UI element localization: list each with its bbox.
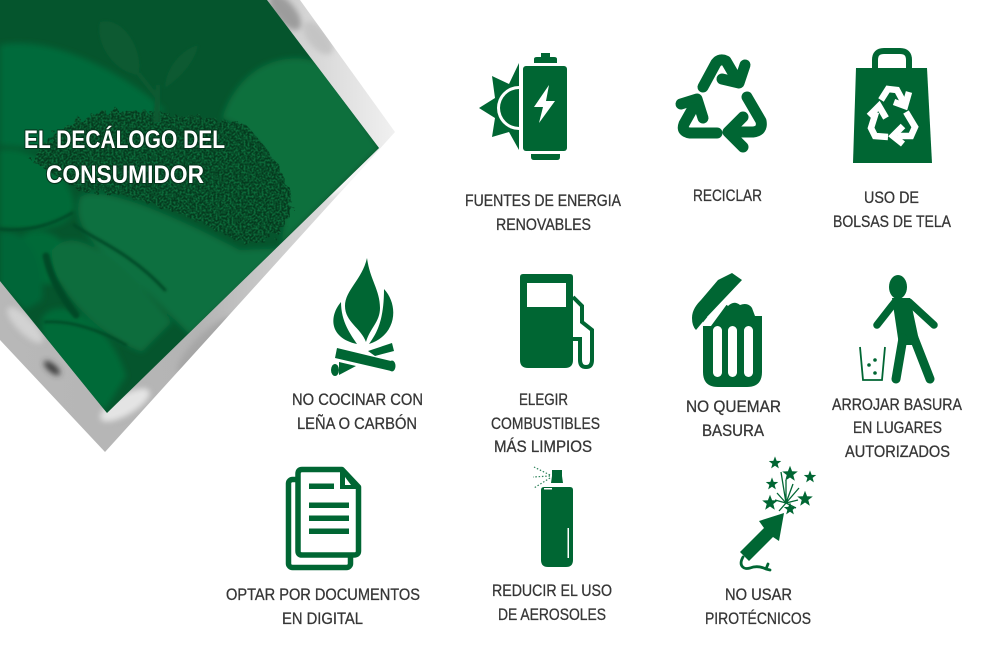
label: RENOVABLES xyxy=(496,216,591,234)
label: ARROJAR BASURA xyxy=(832,396,962,414)
item: optar por documentos en digital xyxy=(226,470,420,628)
label: BASURA xyxy=(702,422,764,440)
label: RECICLAR xyxy=(693,187,762,205)
label: NO USAR xyxy=(725,586,792,604)
label xyxy=(833,189,951,231)
icon: person and bin xyxy=(860,275,934,380)
label: MÁS LIMPIOS xyxy=(494,437,592,456)
item: uso de bolsas de tela xyxy=(833,51,951,231)
item: reducir el uso de aerosoles xyxy=(492,467,612,624)
label: BOLSAS DE TELA xyxy=(833,213,951,231)
seedling xyxy=(152,96,160,122)
item: no cocinar con leña o carbón xyxy=(292,258,423,433)
icon: shopping bag xyxy=(853,51,932,163)
label xyxy=(492,582,612,624)
icon: firework rocket xyxy=(740,456,816,570)
label: PIROTÉCNICOS xyxy=(705,609,811,628)
label: USO DE xyxy=(864,189,919,207)
label: EN LUGARES xyxy=(853,419,942,437)
title: EL DECÁLOGO DEL xyxy=(24,125,225,154)
soil xyxy=(30,110,291,242)
icon: fuel pump xyxy=(520,274,592,368)
label xyxy=(465,192,621,234)
item: no quemar basura xyxy=(686,273,781,440)
label xyxy=(292,391,423,433)
label: REDUCIR EL USO xyxy=(492,582,612,600)
title xyxy=(24,125,225,189)
item: reciclar xyxy=(681,60,762,205)
label: NO QUEMAR xyxy=(686,398,781,416)
item: elegir combustibles más limpios xyxy=(491,274,600,456)
item: arrojar basura en lugares autorizados xyxy=(832,275,962,461)
label xyxy=(491,391,600,456)
label: AUTORIZADOS xyxy=(845,443,950,461)
label: OPTAR POR DOCUMENTOS xyxy=(226,586,420,604)
item: no usar pirotécnicos xyxy=(705,456,816,628)
icon: trash can xyxy=(692,273,762,387)
label: ELEGIR xyxy=(519,391,568,409)
icon: documents xyxy=(288,470,358,568)
label: EN DIGITAL xyxy=(282,610,363,628)
photo panel: hands holding a seedling xyxy=(0,0,400,460)
label: LEÑA O CARBÓN xyxy=(297,413,417,433)
hands xyxy=(0,43,165,150)
icon: sun and battery xyxy=(479,53,567,160)
title: CONSUMIDOR xyxy=(46,161,204,189)
item: fuentes de energia renovables xyxy=(465,53,621,234)
icon: campfire xyxy=(331,258,396,376)
icon: recycling arrows xyxy=(681,60,761,147)
label xyxy=(226,586,420,628)
label: NO COCINAR CON xyxy=(292,391,423,409)
label: COMBUSTIBLES xyxy=(491,415,600,433)
label xyxy=(686,398,781,440)
label: FUENTES DE ENERGIA xyxy=(465,192,621,210)
label: DE AEROSOLES xyxy=(498,606,606,624)
label xyxy=(832,396,962,461)
label xyxy=(705,586,811,628)
icon: spray can xyxy=(533,467,573,567)
